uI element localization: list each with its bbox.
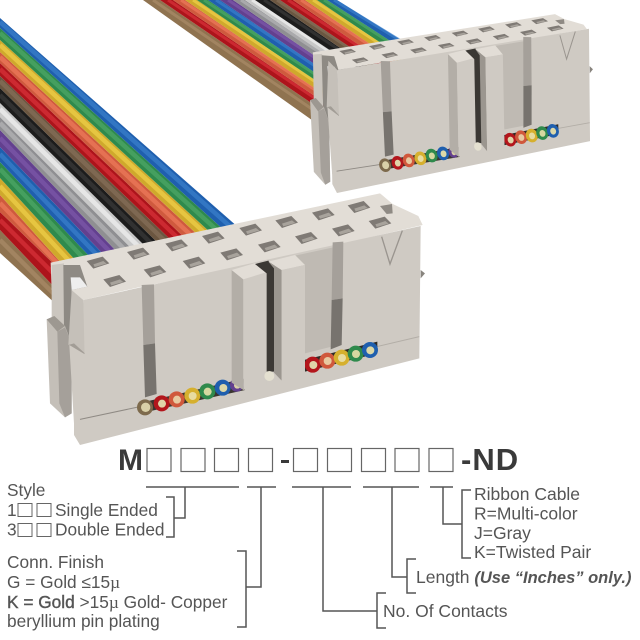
legend: number of contacts: No. Of Contacts xyxy=(383,601,508,621)
legend: ribbon cable: R=Multi-color xyxy=(474,504,578,524)
ribbon cable: upper xyxy=(143,0,420,140)
legend: style: Style xyxy=(7,480,45,500)
front face, wire ends and centre key slot xyxy=(68,226,425,445)
leader lines xyxy=(146,487,471,628)
legend: style: 3 xyxy=(7,520,17,540)
connector: small rear xyxy=(309,6,596,215)
top face with contact holes xyxy=(51,193,423,300)
legend: ribbon cable: J=Gray xyxy=(474,523,531,543)
connector: large front xyxy=(47,193,425,445)
legend: ribbon cable: K=Twisted Pair xyxy=(474,542,591,562)
legend: style: Double Ended xyxy=(55,520,165,540)
legend: style: Single Ended xyxy=(55,500,158,520)
legend: style xyxy=(7,480,165,540)
legend: ribbon cable xyxy=(474,484,591,562)
legend: connector finish: K = Gold >15µ Gold- Copper xyxy=(7,592,228,612)
ribbon cable: lower xyxy=(0,18,239,305)
legend: connector finish: Conn. Finish xyxy=(7,552,104,572)
part number heading: -ND xyxy=(461,442,519,477)
left wall and latch tab xyxy=(47,263,87,417)
legend: connector finish: G = Gold ≤15µ xyxy=(7,572,120,592)
part number heading xyxy=(118,442,519,477)
part number heading: M xyxy=(118,444,143,477)
legend: length: Length (Use “Inches” only.) xyxy=(416,567,632,587)
legend: connector finish xyxy=(7,552,228,631)
legend: connector finish: beryllium pin plating xyxy=(7,611,160,631)
legend: style: 1 xyxy=(7,500,17,520)
legend: ribbon cable: Ribbon Cable xyxy=(474,484,580,504)
